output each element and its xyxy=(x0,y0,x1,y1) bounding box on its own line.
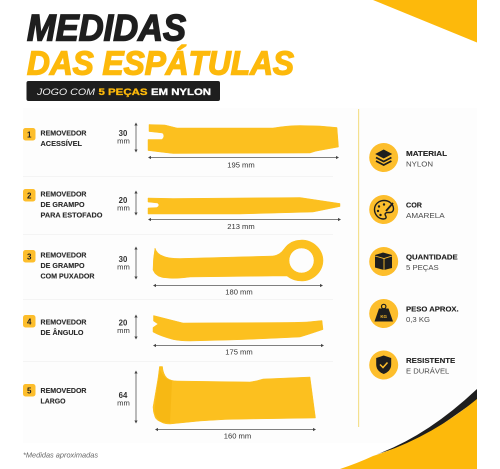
subtitle banner xyxy=(26,81,220,101)
spec: material xyxy=(369,143,448,172)
label 5: REMOVEDOR xyxy=(40,386,87,395)
vertical divider xyxy=(358,109,359,427)
width dimension 175 mm xyxy=(153,344,324,356)
height dimension 30 mm xyxy=(117,246,138,280)
height dimension 20 mm: mm xyxy=(117,326,130,335)
tool 3 xyxy=(153,240,323,281)
spec: resistente xyxy=(369,350,455,380)
text: quantidade 5 peças xyxy=(406,252,458,272)
number badge 3: 3 xyxy=(27,252,32,261)
width dimension 195 mm: 195 mm xyxy=(227,160,255,170)
icon: palette xyxy=(369,195,398,224)
height dimension 20 mm: 20 xyxy=(119,318,128,328)
label 5 xyxy=(40,386,87,406)
number badge 4: 4 xyxy=(27,317,32,326)
width dimension 160 mm xyxy=(155,428,316,440)
label 1: REMOVEDOR xyxy=(40,128,87,138)
icon: box xyxy=(369,247,398,276)
number badge 5 xyxy=(23,384,36,396)
label 1 xyxy=(40,128,87,148)
text: cor amarela: AMARELA xyxy=(406,211,445,220)
spec: quantidade xyxy=(369,247,458,276)
text: resistente e durável: RESISTENTE xyxy=(406,356,455,365)
width dimension 180 mm xyxy=(153,284,323,296)
text: resistente e durável xyxy=(406,356,455,376)
label 2: DE GRAMPO xyxy=(40,200,85,209)
row 4: removedor de ângulo xyxy=(23,314,324,356)
icon: layers xyxy=(369,143,398,172)
number badge 3 xyxy=(23,250,36,262)
tool 2 xyxy=(148,198,340,214)
subtitle banner: EM NYLON xyxy=(151,87,211,98)
height dimension 30 mm: 30 xyxy=(119,129,128,138)
corner accent: bottom right xyxy=(340,389,477,469)
text: quantidade 5 peças: QUANTIDADE xyxy=(406,252,458,262)
title xyxy=(27,8,294,82)
tool 5 xyxy=(153,366,316,424)
number badge 2: 2 xyxy=(27,191,32,200)
text: peso aprox xyxy=(406,304,459,324)
label 4: REMOVEDOR xyxy=(40,318,87,326)
tool 1 xyxy=(148,124,338,154)
text: cor amarela: COR xyxy=(406,200,423,210)
title line: das espátulas: DAS ESPÁTULAS xyxy=(27,44,294,82)
corner triangle: top right xyxy=(373,0,477,42)
height dimension 20 mm: 20 xyxy=(119,196,128,205)
number badge 4 xyxy=(23,315,36,328)
number badge 1 xyxy=(23,128,36,140)
height dimension 64 mm: mm xyxy=(117,398,130,408)
width dimension 213 mm: 213 mm xyxy=(227,222,255,231)
label 3: COM PUXADOR xyxy=(40,272,95,280)
text: cor amarela xyxy=(406,200,445,220)
width dimension 180 mm: 180 mm xyxy=(225,288,253,296)
text: peso aprox: PESO APROX. xyxy=(406,304,459,314)
number badge 2 xyxy=(23,189,36,202)
row 2: removedor de grampo para estofado xyxy=(23,189,341,231)
label 3: REMOVEDOR xyxy=(40,250,87,260)
height dimension 20 mm: mm xyxy=(117,204,130,212)
label 4: DE ÂNGULO xyxy=(40,328,84,337)
width dimension 175 mm: 175 mm xyxy=(225,348,253,356)
height dimension 30 mm: mm xyxy=(117,262,130,272)
spec: peso xyxy=(369,299,459,328)
width dimension 213 mm xyxy=(148,218,341,231)
icon: weight: KG xyxy=(380,314,388,319)
width dimension 195 mm xyxy=(148,156,339,170)
label 3 xyxy=(40,250,95,280)
text: material nylon: NYLON xyxy=(406,160,433,168)
height dimension 30 mm: 30 xyxy=(119,255,128,264)
label 3: DE GRAMPO xyxy=(40,261,85,270)
label 4 xyxy=(40,318,87,337)
row 3: removedor de grampo com puxador xyxy=(23,240,323,296)
row 1: removedor acessível xyxy=(23,122,339,170)
text: material nylon: MATERIAL xyxy=(406,149,448,158)
label 2: REMOVEDOR xyxy=(40,190,87,198)
height dimension 64 mm: 64 xyxy=(119,391,128,400)
height dimension 20 mm xyxy=(117,190,138,216)
height dimension 30 mm xyxy=(117,122,138,152)
subtitle banner: 5 PEÇAS xyxy=(98,87,148,98)
height dimension 64 mm xyxy=(117,370,138,424)
subtitle banner: JOGO COM xyxy=(36,87,95,98)
spec: cor xyxy=(369,195,445,224)
text: material nylon xyxy=(406,149,448,168)
width dimension 160 mm: 160 mm xyxy=(224,432,251,440)
height dimension 20 mm xyxy=(117,314,138,340)
text: peso aprox: 0,3 KG xyxy=(406,315,430,324)
height dimension 30 mm: mm xyxy=(117,136,130,146)
label 1: ACESSÍVEL xyxy=(40,139,82,148)
title line: medidas: MEDIDAS xyxy=(27,8,186,48)
number badge 5: 5 xyxy=(27,386,32,395)
footnote: *Medidas aproximadas xyxy=(23,452,99,460)
text: resistente e durável: E DURÁVEL xyxy=(406,366,449,376)
text: quantidade 5 peças: 5 PEÇAS xyxy=(406,263,439,272)
label 2 xyxy=(40,190,103,220)
row 5: removedor largo xyxy=(23,366,316,440)
number badge 1: 1 xyxy=(27,130,32,139)
label 5: LARGO xyxy=(40,396,66,406)
icon: shield xyxy=(369,350,398,380)
tool 4 xyxy=(153,316,323,341)
label 2: PARA ESTOFADO xyxy=(40,210,103,220)
